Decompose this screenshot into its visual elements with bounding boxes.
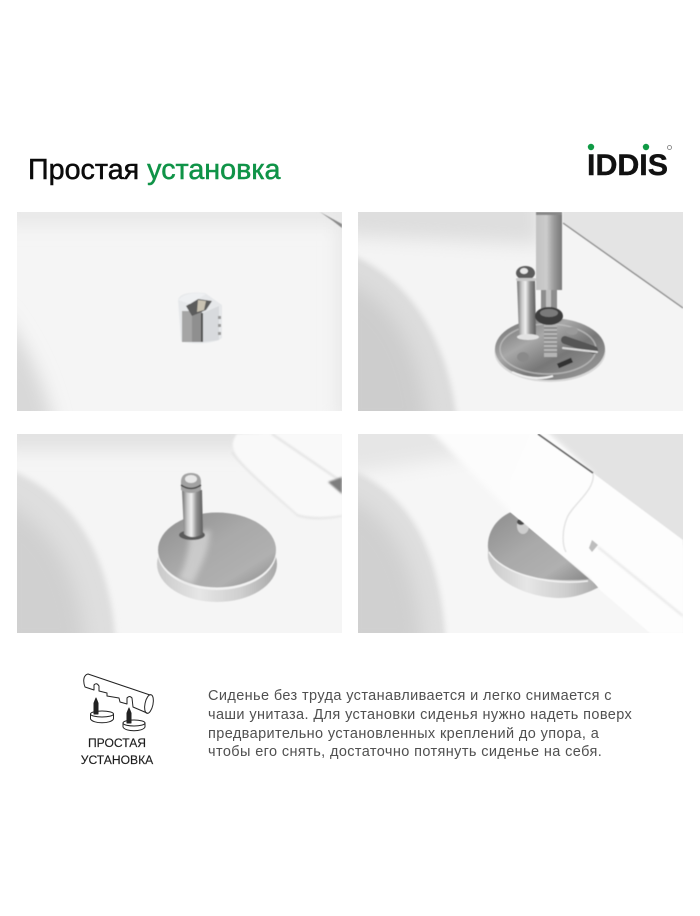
panel: photo 2, screwing the mount plate xyxy=(358,212,683,411)
icon: mount plate xyxy=(494,212,606,382)
icon caption: УСТАНОВКА xyxy=(81,753,154,767)
description text: Сиденье без труда устанавливается и легко снимается с xyxy=(208,688,612,704)
title: Простая установка xyxy=(28,154,281,186)
icon: mount disc with pin xyxy=(157,473,277,602)
bowl shadow xyxy=(358,473,446,633)
icon: metal insert xyxy=(178,293,222,343)
icon: pin xyxy=(517,280,536,337)
icon: screwdriver xyxy=(536,212,562,290)
icon caption: ПРОСТАЯ xyxy=(88,736,146,750)
panel: photo 3, installed mount xyxy=(17,434,342,633)
description text: чаши унитаза. Для установки сиденья нужно надеть поверх xyxy=(208,707,633,723)
description text: предварительно установленных креплений до упора, а xyxy=(208,726,600,742)
icon: half mount disc xyxy=(488,512,599,598)
icon: screw xyxy=(544,323,557,357)
description text: чтобы его снять, достаточно потянуть сиденье на себя. xyxy=(208,744,602,760)
seat band xyxy=(433,434,590,468)
seat outline at top right xyxy=(232,434,256,456)
panel: photo 4, seat clicked on the mount xyxy=(358,434,683,633)
back of the toilet xyxy=(563,212,683,307)
icon: white seat hinge xyxy=(510,434,683,588)
icon: simple installation pictogram xyxy=(84,674,155,731)
panel: photo 1, insert in the bowl rim xyxy=(17,212,342,411)
bowl shadow xyxy=(358,256,457,411)
logo: IDDIS: IDDIS xyxy=(587,149,668,182)
back of the toilet xyxy=(550,434,683,540)
bowl shadow xyxy=(17,472,116,633)
